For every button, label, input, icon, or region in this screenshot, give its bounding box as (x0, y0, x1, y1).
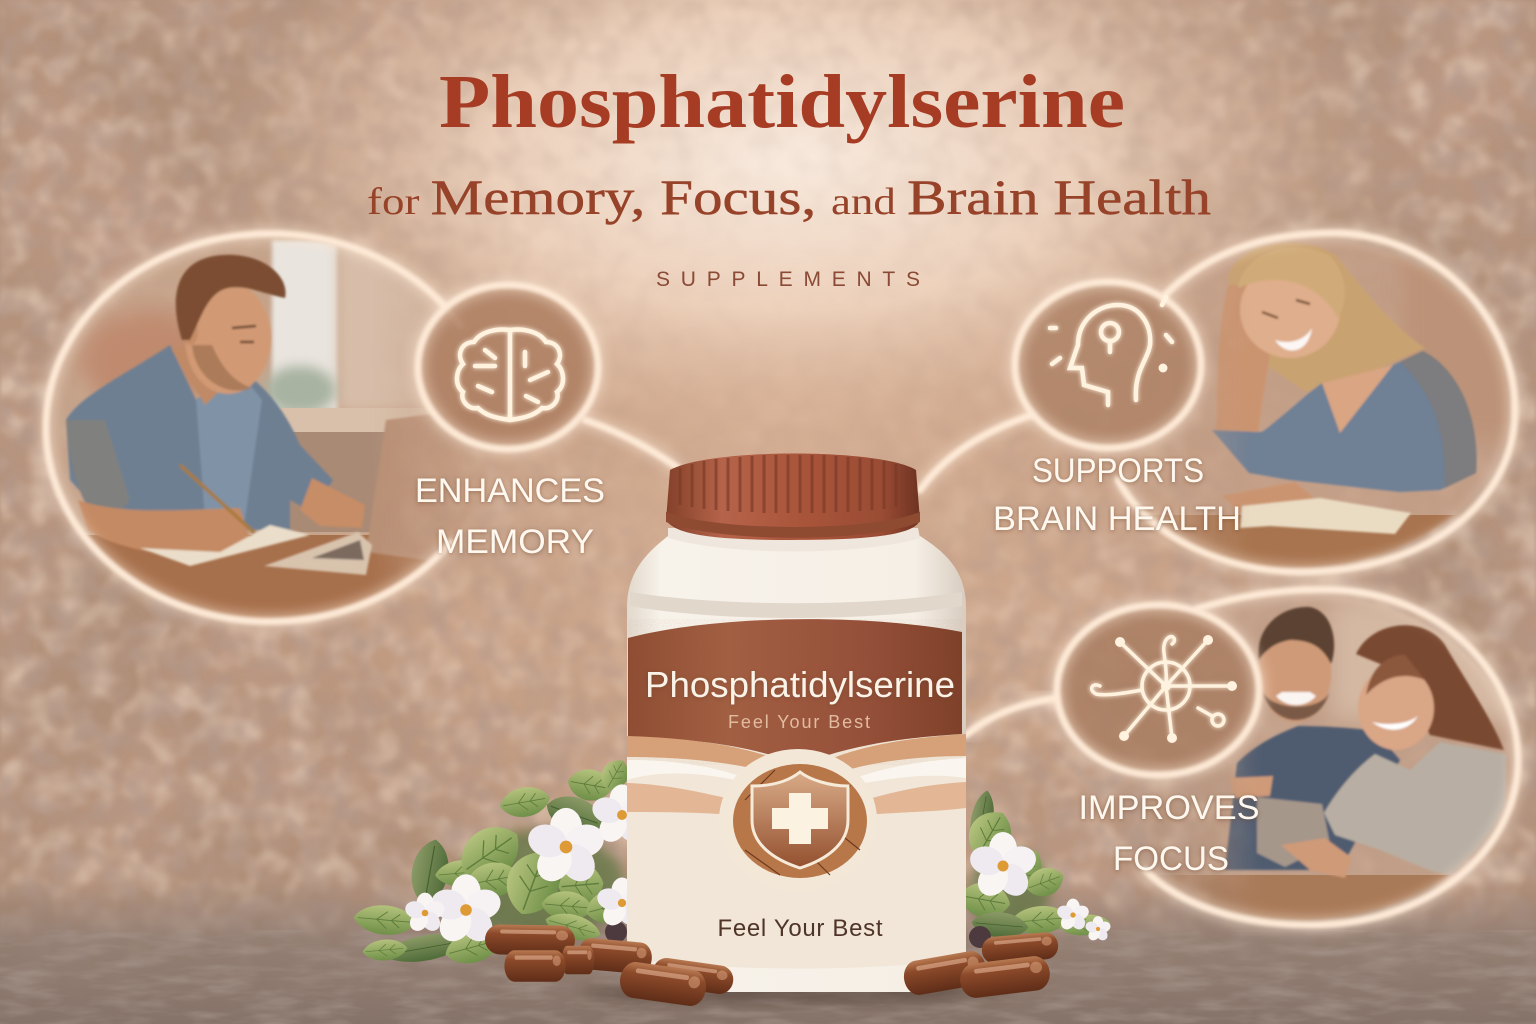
category label: SUPPLEMENTS (656, 268, 920, 291)
icon: brain badge (418, 285, 598, 449)
bottle (627, 454, 966, 992)
label: upper band (628, 619, 962, 765)
woman: forearm and hand (1216, 285, 1272, 432)
label: enhances memory (415, 472, 605, 561)
label: enhances memory: ENHANCES (415, 472, 605, 510)
connector: brain health to bottle (920, 414, 1035, 490)
hands (1229, 776, 1352, 878)
bubble scene: man with laptop (52, 238, 474, 619)
man: neck and head (172, 347, 218, 406)
woman: hair top (1238, 248, 1345, 318)
capsules: left (485, 924, 735, 1008)
woman: hair back (1228, 243, 1425, 392)
title: Phosphatidylserine (439, 60, 1125, 144)
tablet (1257, 797, 1330, 867)
bubble ring (1145, 590, 1518, 925)
subtitle: for Memory, Focus, and Brain Health (367, 169, 1211, 225)
label: improves focus: FOCUS (1113, 840, 1229, 878)
icon: shield emblem (719, 749, 877, 891)
ground shadow (580, 980, 1010, 1004)
bottle: bottom tagline: Feel Your Best (718, 915, 883, 942)
connector: focus to bottle (966, 698, 1058, 735)
panel: enhances memory (40, 230, 678, 635)
bubble scene: woman reading (1134, 240, 1510, 569)
man: hoodie (1225, 726, 1400, 870)
connector: memory to bottle (585, 420, 678, 468)
label: supports brain health: SUPPORTS (1032, 452, 1204, 490)
bottle: tagline: Feel Your Best (728, 712, 870, 732)
woman: face (1358, 666, 1434, 750)
bottle: body (627, 536, 966, 992)
bottle: product name: Phosphatidylserine (645, 664, 955, 705)
woman: face (1240, 280, 1340, 358)
woman: hair (1356, 625, 1504, 750)
man: shirt (66, 345, 333, 530)
pencil (180, 465, 260, 538)
panel: supports brain health (920, 230, 1520, 580)
label: supports brain health: BRAIN HEALTH (993, 500, 1241, 538)
woman: hand on table (1224, 482, 1313, 512)
notebook (140, 525, 310, 566)
bubble ring (1118, 233, 1515, 572)
man: arms (78, 500, 252, 558)
bubble scene: couple with tablet (1162, 598, 1512, 920)
label: improves focus (1078, 789, 1260, 878)
capsules: right (901, 931, 1059, 1000)
plants: right (957, 789, 1112, 948)
woman: sweater (1212, 360, 1446, 494)
label: peach stripes (627, 734, 966, 772)
label: enhances memory: MEMORY (436, 523, 594, 561)
man: hair (176, 255, 286, 340)
plants: left (352, 754, 655, 969)
icon: neural network badge (1057, 605, 1259, 775)
label: supports brain health (993, 452, 1241, 538)
bottle: cap (666, 454, 920, 540)
laptop (367, 414, 467, 560)
panel: improves focus (966, 590, 1520, 930)
man: face (1260, 638, 1332, 722)
woman: shirt (1324, 742, 1506, 880)
bubble ring (46, 234, 460, 622)
man: hair (1258, 607, 1334, 664)
bottle: shoulder ridge (630, 592, 962, 618)
book (1240, 498, 1411, 534)
icon: head with idea badge (1015, 282, 1201, 448)
label: improves focus: IMPROVES (1078, 789, 1260, 827)
bottle: neck (668, 528, 920, 552)
label: lower body (627, 738, 966, 968)
